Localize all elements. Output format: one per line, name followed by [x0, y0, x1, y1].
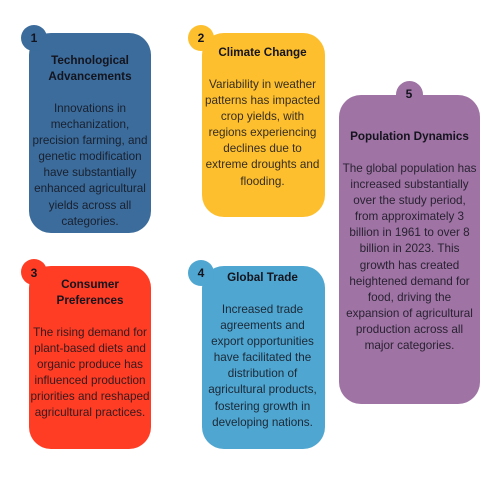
- number 2: 2: [198, 31, 204, 45]
- number badge 2: [188, 25, 214, 51]
- body text: over the study period,: [353, 194, 466, 207]
- body text: Innovations in: [54, 102, 126, 115]
- body text: yields across all: [49, 199, 131, 212]
- body text: export opportunities: [211, 335, 314, 348]
- card background: [202, 33, 325, 217]
- number badge 5: [396, 81, 423, 108]
- number badge 1: [21, 25, 47, 51]
- number 4: 4: [198, 266, 204, 280]
- body text: have substantially: [44, 166, 136, 179]
- card background: [202, 266, 325, 449]
- body text: Variability in weather: [209, 78, 316, 91]
- heading: Advancements: [48, 70, 132, 83]
- body text: [32, 102, 148, 228]
- body text: regions experiencing: [209, 126, 316, 139]
- number badge 4: [188, 260, 214, 286]
- body text: [342, 162, 476, 352]
- body text: mechanization,: [51, 118, 129, 131]
- card background: [29, 33, 151, 233]
- heading: [48, 54, 132, 83]
- body text: genetic modification: [38, 150, 142, 163]
- body text: influenced production: [34, 374, 146, 387]
- body text: distribution of: [228, 367, 297, 380]
- number badge 3: [21, 259, 47, 285]
- body text: food, driving the: [368, 291, 451, 304]
- body text: flooding.: [240, 175, 285, 188]
- body text: priorities and reshaped: [31, 390, 149, 403]
- heading: Global Trade: [227, 271, 298, 284]
- heading: Population Dynamics: [350, 130, 469, 143]
- body text: Increased trade: [222, 303, 303, 316]
- panel: population dynamics: [339, 81, 480, 404]
- body text: enhanced agricultural: [34, 182, 146, 195]
- body text: have facilitated the: [214, 351, 311, 364]
- body text: expansion of agricultural: [346, 307, 473, 320]
- body text: growth has created: [360, 259, 459, 272]
- panel: global trade: [188, 260, 325, 449]
- body text: categories.: [61, 215, 119, 228]
- body text: agreements and: [220, 319, 305, 332]
- body text: [208, 303, 317, 429]
- body text: increased substantially: [350, 178, 469, 191]
- panel: consumer preferences: [21, 259, 151, 449]
- body text: heightened demand for: [349, 275, 470, 288]
- body text: plant-based diets and: [34, 342, 146, 355]
- body text: extreme droughts and: [206, 158, 319, 171]
- body text: declines due to: [223, 142, 302, 155]
- body text: organic produce has: [37, 358, 143, 371]
- body text: [205, 78, 320, 188]
- body text: major categories.: [365, 339, 454, 352]
- body text: billion in 2023. This: [360, 242, 459, 255]
- body text: production across all: [356, 323, 463, 336]
- body text: agricultural practices.: [35, 406, 145, 419]
- body text: precision farming, and: [32, 134, 148, 147]
- body text: The rising demand for: [33, 326, 147, 339]
- body text: developing nations.: [212, 416, 313, 429]
- number 1: 1: [31, 31, 37, 45]
- body text: crop yields, with: [221, 110, 304, 123]
- heading: Preferences: [57, 294, 123, 307]
- body text: [31, 326, 149, 419]
- body text: The global population has: [343, 162, 476, 175]
- card background: [29, 266, 151, 449]
- heading: Consumer: [61, 278, 119, 291]
- body text: fostering growth in: [215, 400, 310, 413]
- heading: Technological: [51, 54, 129, 67]
- card background: [339, 95, 480, 404]
- panel: technological advancements: [21, 25, 151, 233]
- panel: climate change: [188, 25, 325, 217]
- body text: patterns has impacted: [205, 94, 320, 107]
- number 5: 5: [406, 87, 412, 101]
- number 3: 3: [31, 266, 37, 280]
- body text: agricultural products,: [208, 383, 317, 396]
- heading: [57, 278, 123, 307]
- body text: billion in 1961 to over 8: [349, 226, 470, 239]
- heading: Climate Change: [218, 46, 307, 59]
- body text: from approximately 3: [355, 210, 464, 223]
